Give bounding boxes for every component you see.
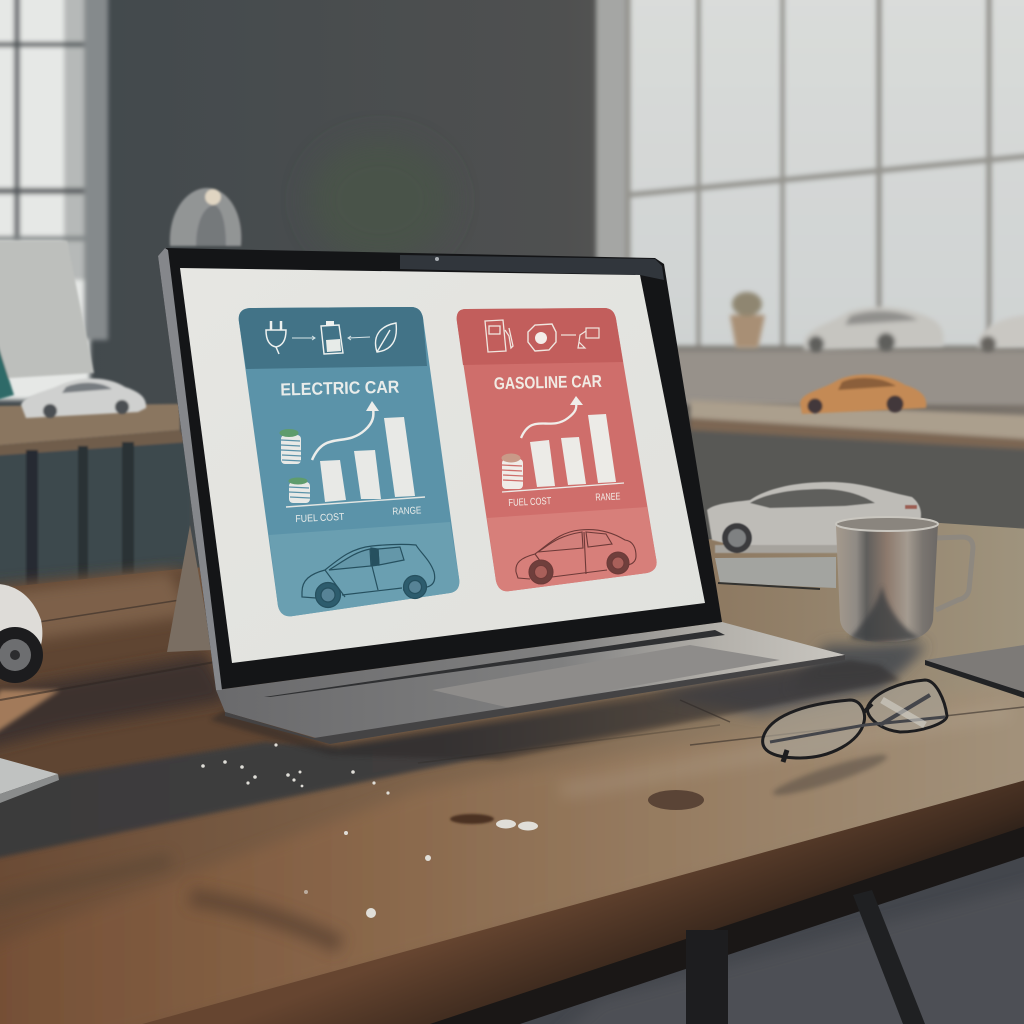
bar chart — [530, 414, 616, 487]
bottom band — [269, 522, 459, 616]
bottom band — [487, 507, 657, 591]
icon: electric hatchback — [302, 544, 435, 608]
axis line — [286, 497, 425, 507]
icon: short coin stack — [288, 478, 310, 503]
card body — [457, 308, 657, 591]
orange model car on shelf — [800, 375, 926, 414]
arrow: rising trend — [312, 401, 379, 460]
panel: gasoline car — [457, 308, 657, 591]
icon: exhaust part — [578, 328, 599, 348]
label: range: RANEE — [595, 491, 621, 504]
icon: fuel pump — [485, 320, 513, 352]
arrow: plug to battery — [292, 336, 315, 340]
left model car on desk — [0, 584, 43, 683]
icon: engine — [528, 324, 556, 351]
eyeglasses — [763, 680, 947, 801]
icon: coin stack — [502, 454, 523, 489]
document under model car — [715, 557, 836, 589]
whiteboard — [0, 241, 94, 402]
wooden desk — [0, 523, 1024, 1024]
header band — [457, 308, 623, 365]
glass lamp — [170, 188, 241, 246]
silver model car — [707, 482, 921, 553]
laptop base — [216, 622, 845, 744]
laptop shadow on desk — [210, 660, 900, 760]
icon: leaf — [376, 323, 396, 352]
shelf right — [690, 400, 1024, 545]
white model car on left shelf — [21, 378, 146, 418]
icon: tall coin stack — [280, 429, 302, 464]
label: fuel cost: FUEL COST — [295, 512, 345, 525]
card body — [239, 307, 459, 616]
laptop lid with screen — [158, 248, 722, 690]
water specks on desk — [201, 743, 538, 918]
header band — [239, 307, 427, 369]
arrow: engine to exhaust — [561, 334, 576, 336]
floor under desk and legs — [420, 820, 1024, 1024]
label: fuel cost: FUEL COST — [508, 496, 552, 509]
icon: battery — [321, 321, 343, 354]
panel: electric car — [239, 307, 459, 616]
shelf left — [0, 404, 190, 590]
notebook — [0, 758, 59, 803]
axis line — [502, 483, 624, 492]
arrow: leaf to battery — [348, 336, 370, 340]
background: blurred wall and windows — [0, 0, 1024, 600]
label: range: RANGE — [392, 505, 422, 518]
arrow: rising trend — [521, 396, 583, 438]
stone on desk — [648, 790, 704, 810]
stain on desk — [450, 814, 494, 824]
desk front edge — [70, 775, 1024, 1024]
tablet — [925, 642, 1024, 700]
faint plant on wall — [310, 140, 450, 260]
bar chart — [320, 417, 415, 502]
icon: plug — [266, 321, 286, 354]
icon: gasoline sedan — [516, 529, 636, 584]
plant pot on sill — [730, 292, 765, 348]
kickstand — [167, 525, 212, 652]
far model cars on sill — [804, 307, 1024, 352]
mug — [836, 517, 973, 642]
heading: gasoline car: GASOLINE CAR — [494, 372, 602, 393]
heading: electric car: ELECTRIC CAR — [280, 377, 400, 399]
